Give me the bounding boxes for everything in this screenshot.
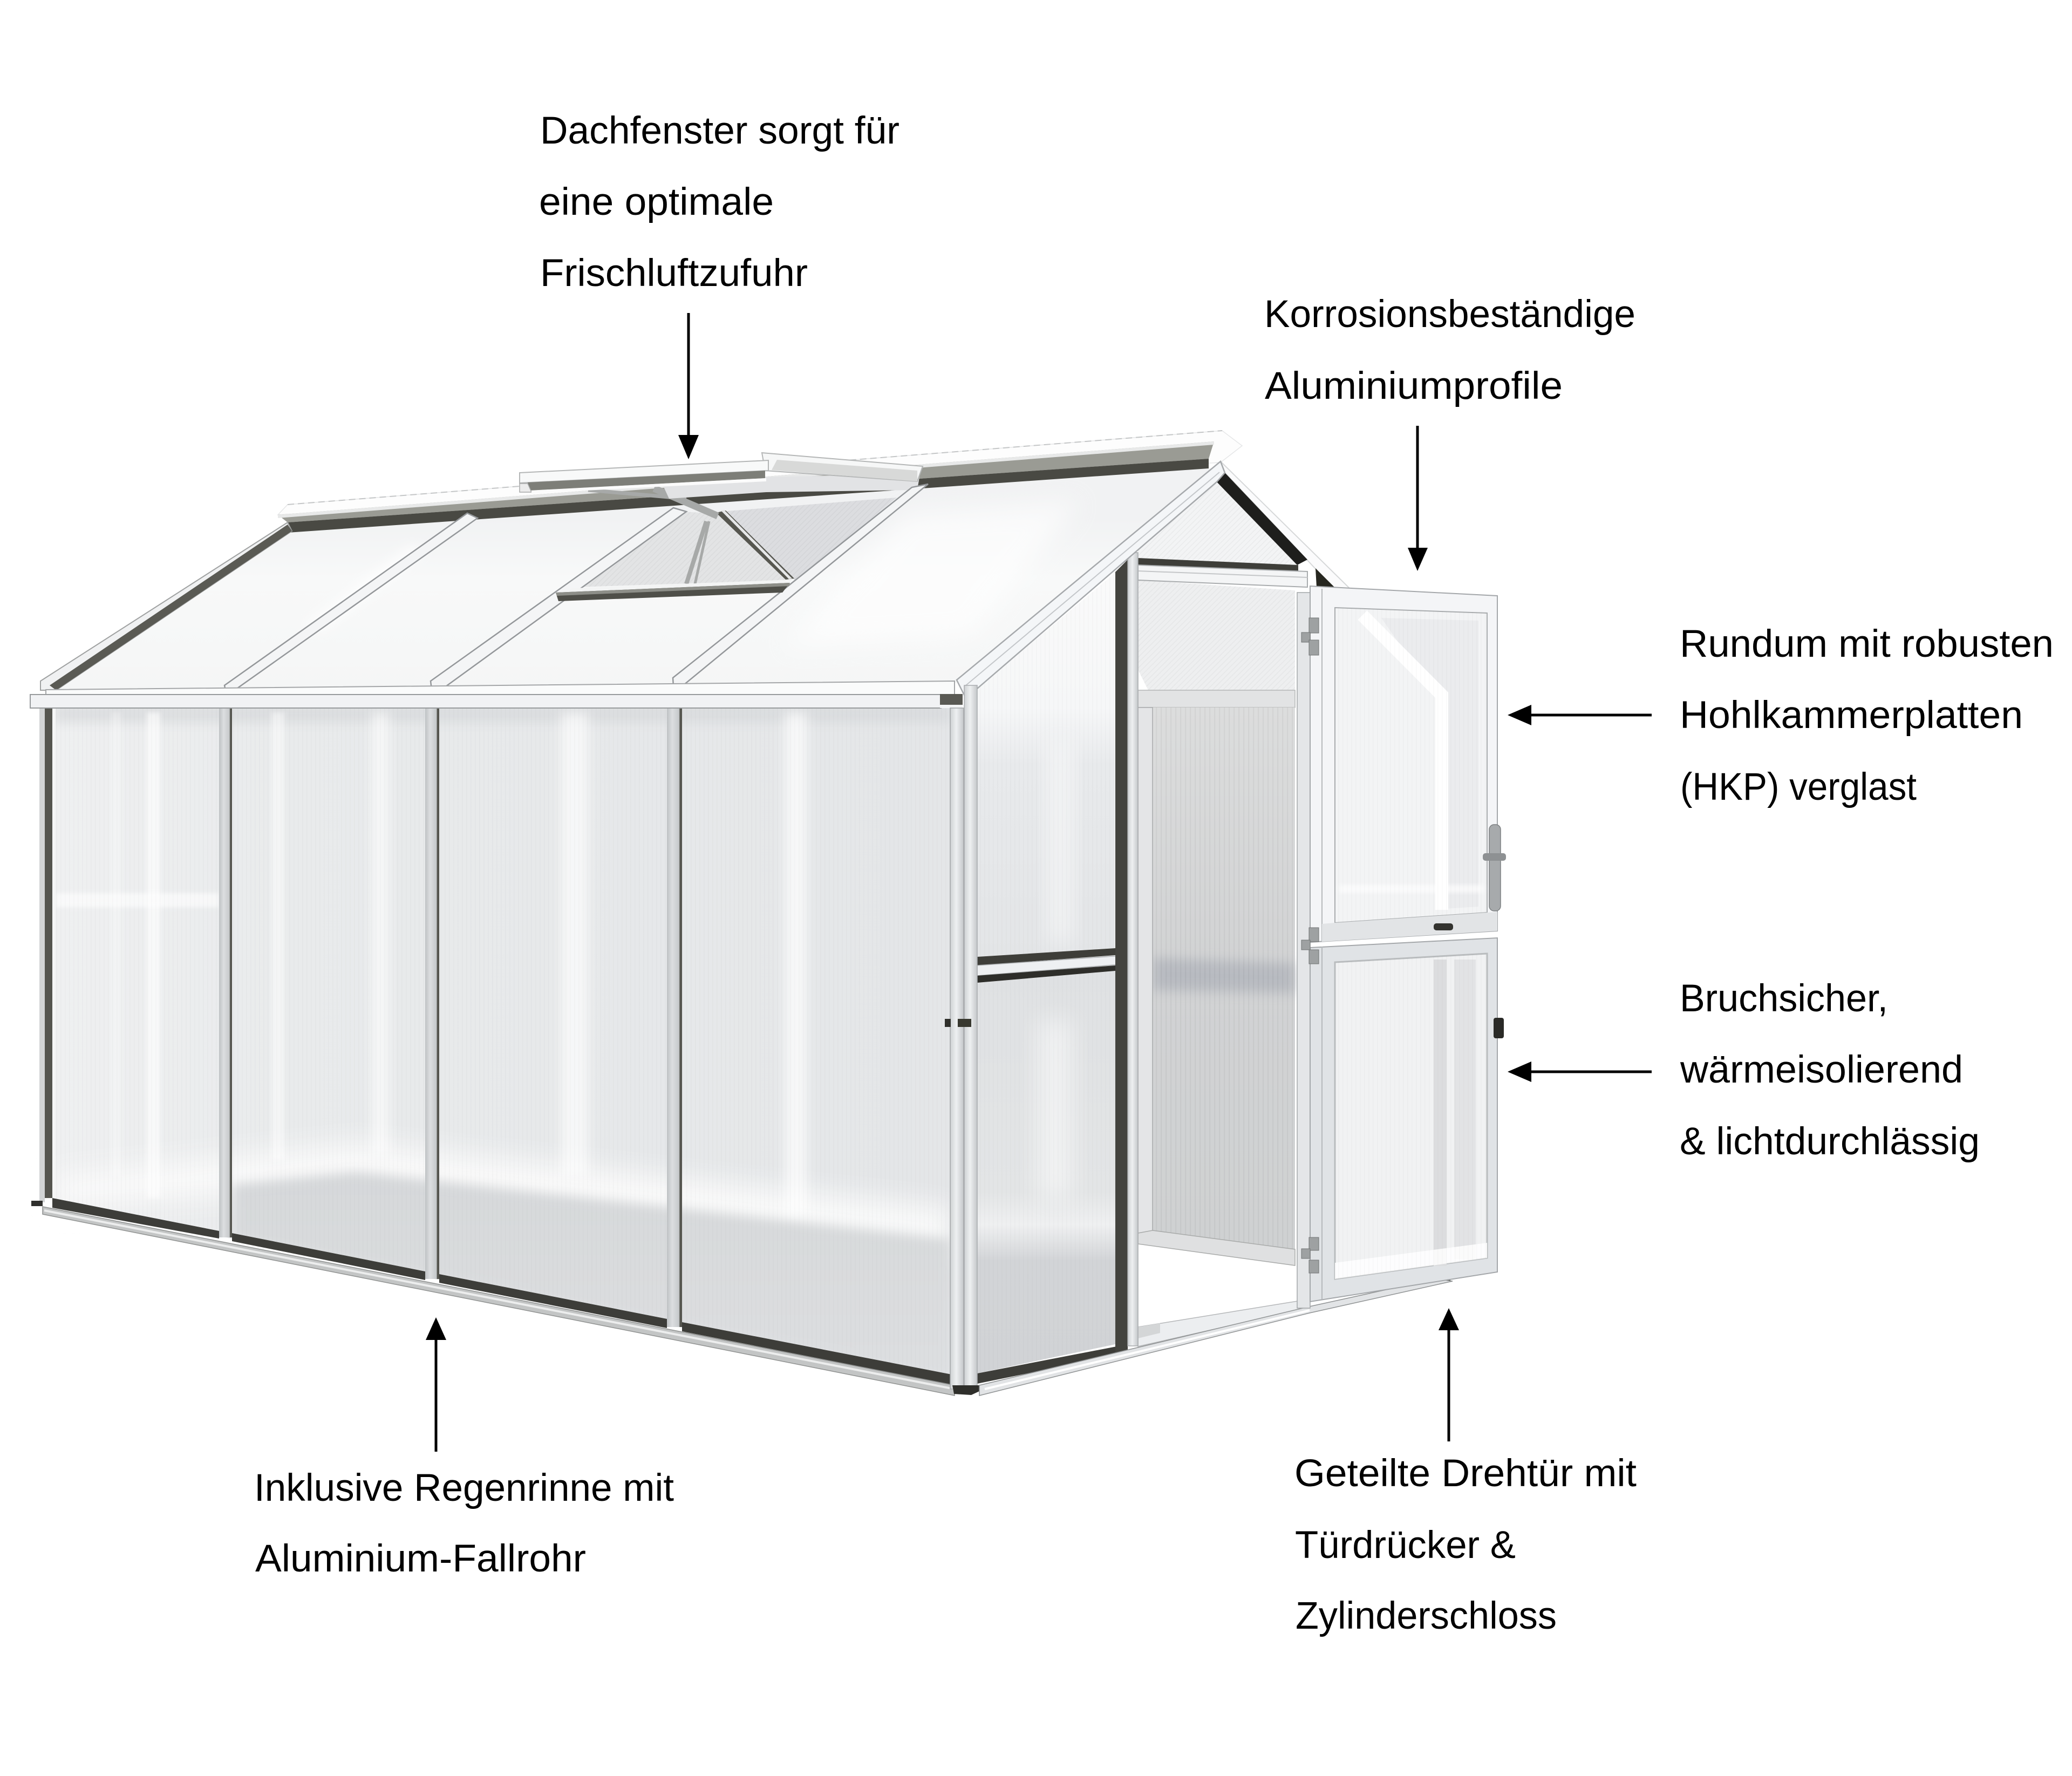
rafter 1: [224, 513, 478, 691]
roof rafters: [224, 484, 928, 691]
left corner post: [39, 708, 56, 1202]
back post: [1138, 707, 1153, 1239]
threshold: [1138, 1299, 1307, 1346]
gutter rail: [43, 1207, 955, 1396]
white gable barge board: [1221, 461, 1350, 589]
back rail: [1138, 690, 1295, 707]
door hinges: [1301, 618, 1319, 1273]
label: roof window: [539, 110, 899, 295]
label: aluminium profiles: [1264, 293, 1635, 407]
upper door glass: [1335, 608, 1487, 923]
label: roof window: Dachfenster sorgt für: [540, 110, 899, 152]
arrow: rain gutter: [426, 1317, 446, 1452]
left hip rafter: [40, 522, 292, 690]
door: [1301, 586, 1506, 1302]
arrow: roof window: [678, 313, 699, 459]
label: split door: Geteilte Drehtür mit: [1294, 1452, 1637, 1495]
front wall panel detail: [977, 573, 1115, 957]
label: roof window: eine optimale: [539, 181, 774, 223]
arrow: twin-wall panels: [1508, 705, 1652, 725]
cylinder lock: [1494, 1018, 1504, 1038]
door post: [1128, 553, 1138, 1346]
window glass edge: [716, 511, 794, 580]
back roof seen through door: [1138, 580, 1295, 690]
label: twin-wall panels: (HKP) verglast: [1680, 766, 1917, 808]
base frame: [31, 1198, 955, 1396]
window opening: [578, 498, 897, 587]
label: split door: Zylinderschloss: [1296, 1595, 1557, 1637]
ridge beam: [278, 431, 1242, 533]
front wall upper panel: [977, 573, 1115, 957]
window support arm: [588, 488, 718, 584]
label: rain gutter: Aluminium-Fallrohr: [255, 1537, 586, 1580]
lower door glass: [1335, 954, 1487, 1279]
interior view through door: [1138, 580, 1307, 1346]
floor reflection: [54, 1141, 951, 1257]
label: twin-wall panels: Rundum mit robusten: [1680, 623, 2054, 665]
wall mullions: [219, 708, 682, 1327]
door foot: [1437, 1277, 1450, 1281]
label: roof window: Frischluftzufuhr: [540, 252, 808, 295]
gable rafter: [957, 461, 1225, 696]
door handle: [1483, 825, 1506, 911]
front gable top: [1138, 461, 1350, 589]
rafter 3: [673, 484, 928, 686]
reflection: back wall through door glass: [1381, 618, 1478, 909]
front sill rail: [979, 1277, 1453, 1396]
arrow: aluminium profiles: [1408, 426, 1428, 571]
arrow: split door: [1439, 1308, 1459, 1441]
label: twin-wall panels: Hohlkammerplatten: [1680, 694, 2023, 737]
front transom: [977, 948, 1128, 983]
window sill bar: [556, 580, 792, 601]
back wall panel: [1153, 707, 1295, 1249]
corner foot: [952, 1385, 979, 1395]
label: twin-wall panels: [1680, 623, 2054, 808]
clean base edge: [54, 1205, 951, 1392]
lower door leaf: [1310, 938, 1497, 1302]
black gable seal: [1217, 473, 1307, 565]
opened roof window: [520, 453, 923, 587]
rafter 2: [431, 508, 686, 690]
door hinge post: [1297, 593, 1310, 1308]
dark door-side pillar: [1115, 560, 1128, 1356]
label: panel properties: [1680, 977, 1980, 1163]
upper door leaf: [1310, 586, 1497, 942]
label: split door: [1294, 1452, 1637, 1637]
label: aluminium profiles: Korrosionsbeständige: [1264, 293, 1635, 336]
door catch: [1434, 923, 1453, 930]
wall panels: [54, 704, 951, 1392]
eave gutter: [30, 681, 963, 708]
label: rain gutter: Inklusive Regenrinne mit: [254, 1467, 674, 1509]
front corner post: [945, 685, 979, 1395]
label: rain gutter: [254, 1467, 674, 1580]
back bottom rail: [1138, 1230, 1295, 1265]
label: panel properties: wärmeisolierend: [1680, 1049, 1963, 1091]
label: panel properties: Bruchsicher,: [1680, 977, 1888, 1020]
label: aluminium profiles: Aluminiumprofile: [1265, 365, 1563, 407]
front bottom seal: [977, 1344, 1128, 1384]
roof glazing: [49, 468, 1211, 690]
dark bottom seal: [52, 1198, 219, 1239]
raised sash: [520, 453, 923, 499]
label: panel properties: & lichtdurchlässig: [1680, 1120, 1980, 1163]
top shadow: [54, 704, 951, 723]
lower rail shading: [1322, 912, 1497, 942]
background light strips: [56, 712, 807, 1214]
greenhouse illustration: [30, 431, 1506, 1396]
rail end cap: [31, 1201, 43, 1206]
arrow: panel properties: [1508, 1061, 1652, 1082]
label: split door: Türdrücker &: [1295, 1524, 1516, 1567]
front wall lower panel: [977, 971, 1115, 1373]
wall clamp: [945, 1019, 951, 1027]
